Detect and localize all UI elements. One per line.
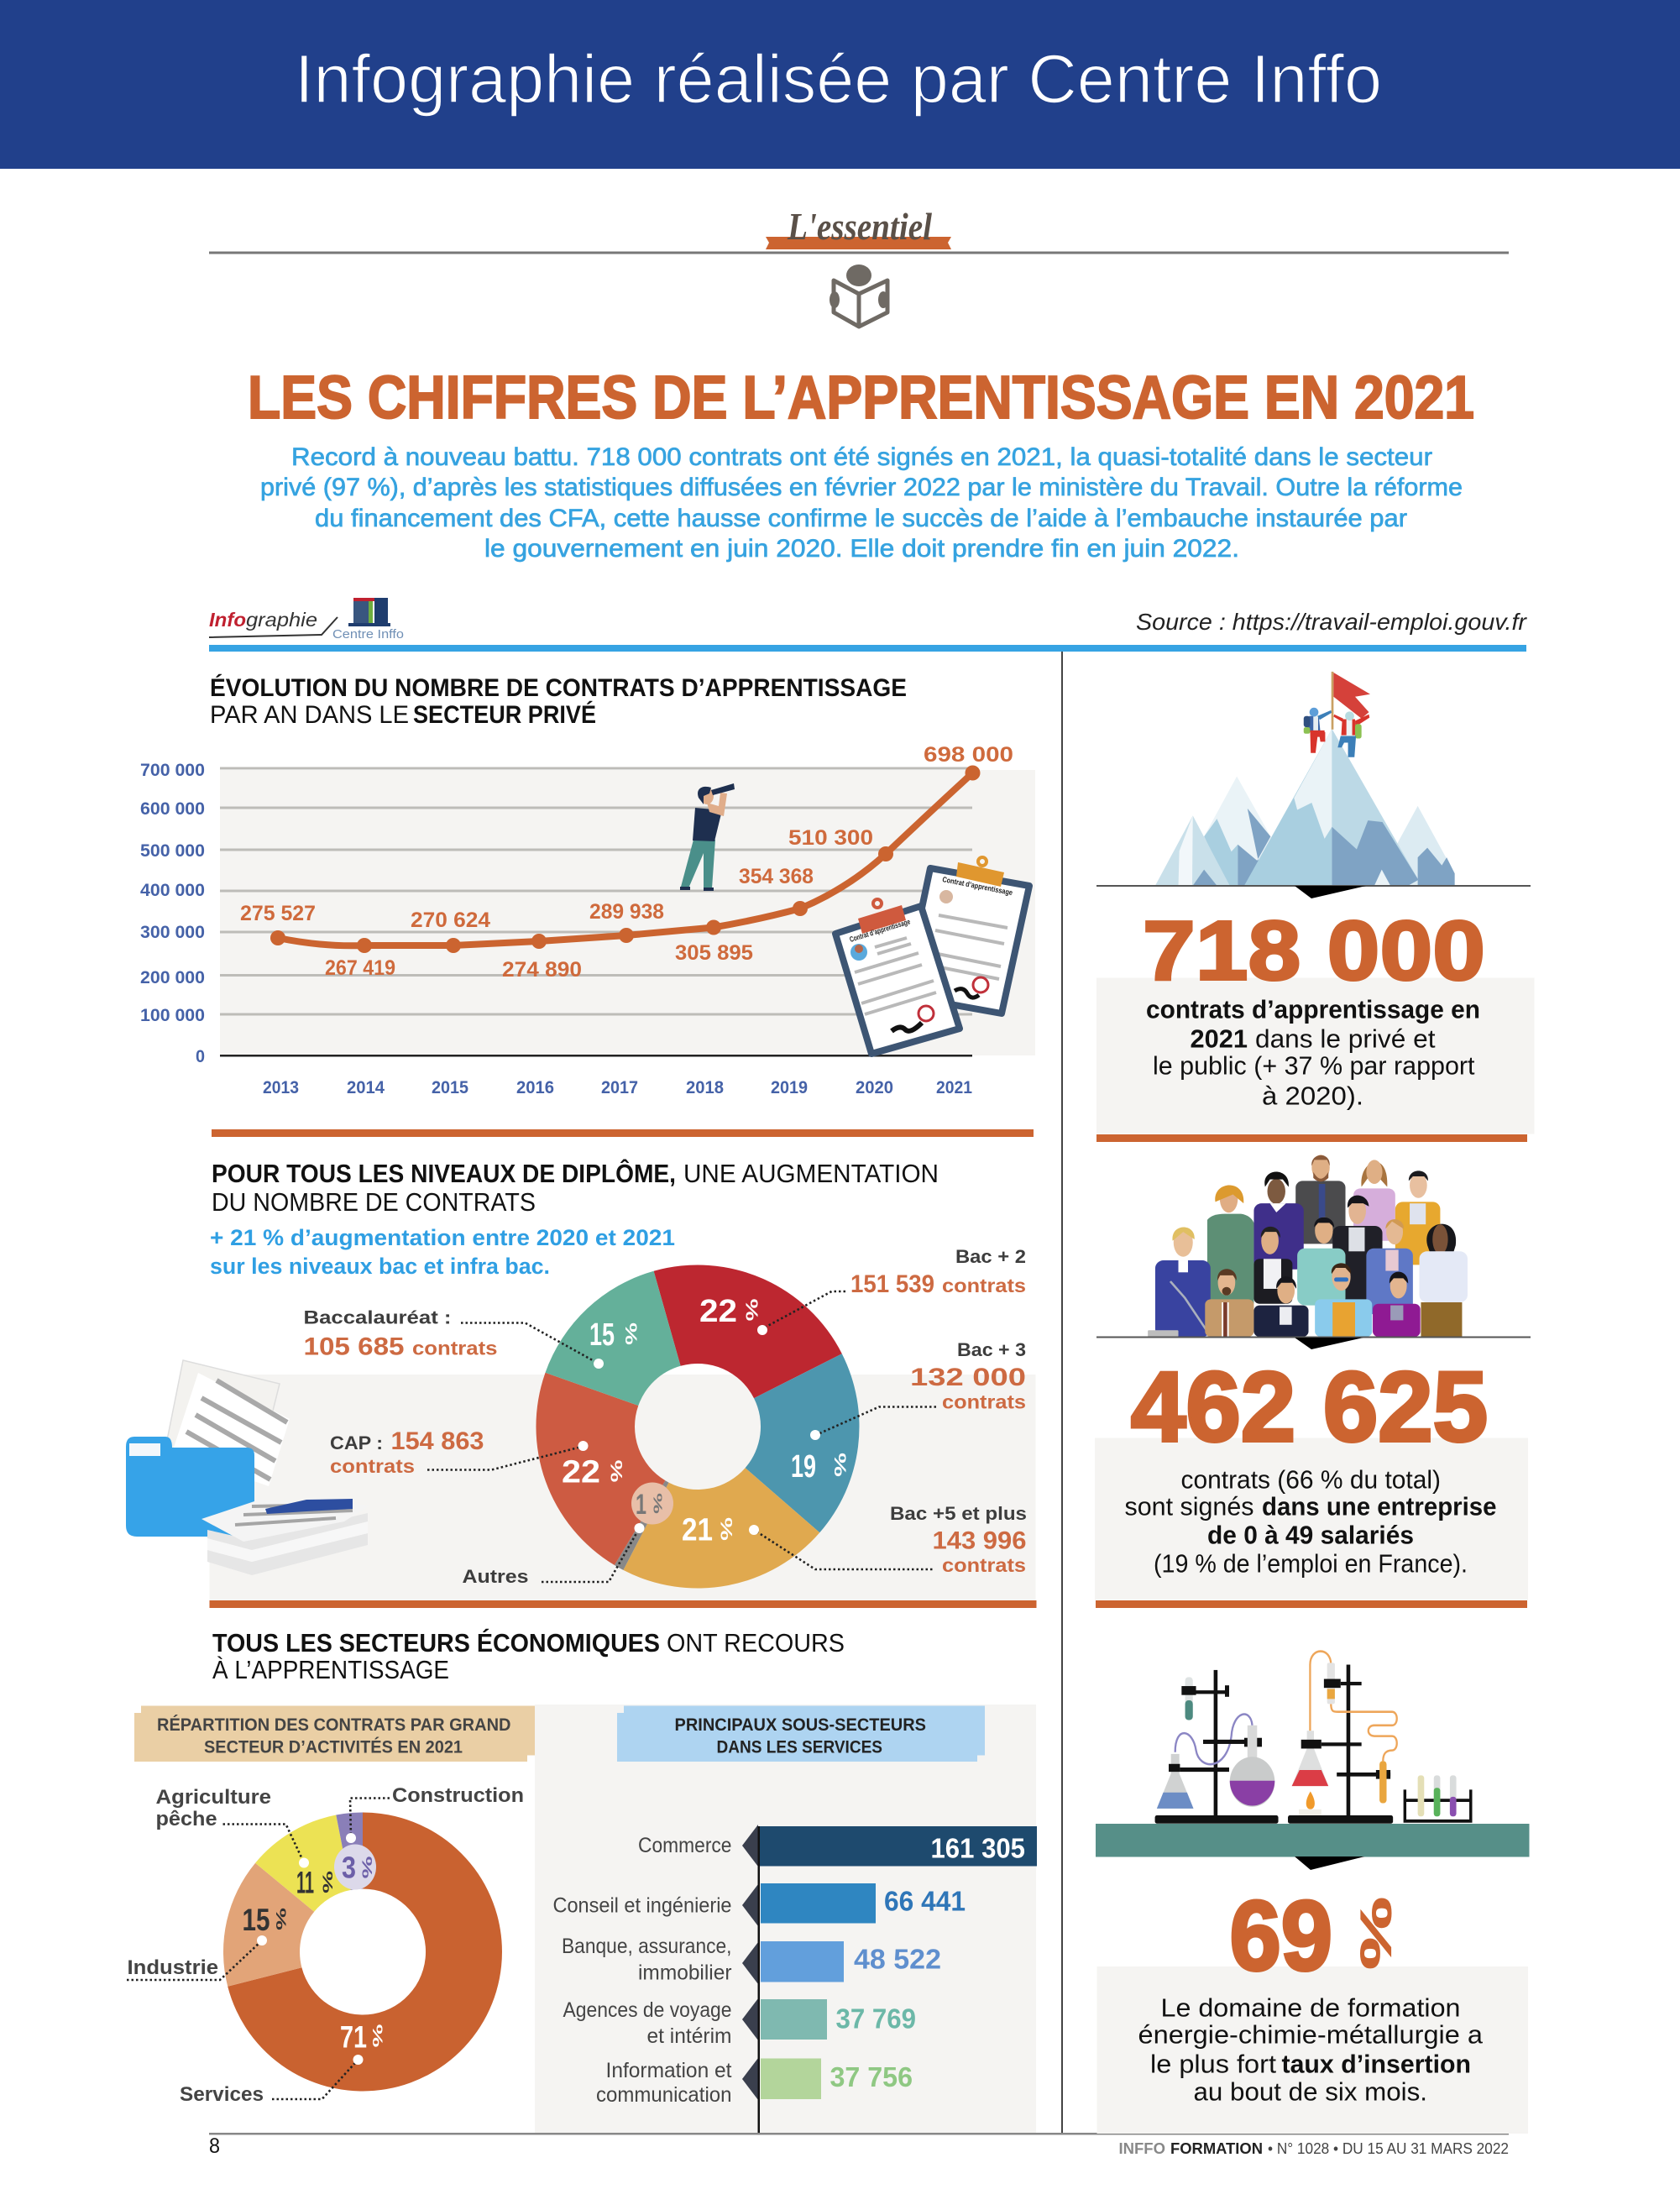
- heading: evolution: SECTEUR PRIVÉ: [413, 700, 596, 729]
- data labels: 274 890: [502, 958, 582, 982]
- footer credit: [1118, 2140, 1509, 2157]
- x axis labels: 2018: [686, 1078, 724, 1097]
- section rule: [212, 1129, 1034, 1137]
- leader lines: [427, 1291, 936, 1582]
- bar: agences: 37 769: [836, 2003, 916, 2034]
- x axis labels: 2021: [936, 1078, 972, 1097]
- heading: diploma: UNE AUGMENTATION: [683, 1159, 939, 1188]
- footer credit: INFFO: [1118, 2140, 1165, 2157]
- segment: Bac + 3: [746, 1354, 859, 1532]
- tag: repartition: SECTEUR D’ACTIVITÉS EN 2021: [204, 1738, 463, 1757]
- label: Baccalauréat: contrats: [412, 1337, 497, 1359]
- back clipboard: [903, 857, 1029, 1013]
- segment: agriculture: [255, 1815, 351, 1912]
- panel: evolution chart: [140, 673, 1035, 1137]
- description: sont signés: [1125, 1491, 1254, 1521]
- label: CAP: 154 863: [391, 1427, 484, 1455]
- data labels: 267 419: [325, 956, 395, 980]
- data labels: 275 527: [240, 902, 316, 925]
- icon: contract clipboards: [835, 857, 1029, 1054]
- donut chart: sectors: [223, 1812, 502, 2091]
- logo: Infographie Centre Inffo: graphie: [246, 609, 317, 631]
- logo: Infographie Centre Inffo: [209, 598, 404, 642]
- percent labels: [562, 1294, 848, 1548]
- label: Bac + 3: 132 000: [910, 1364, 1026, 1391]
- heading: diploma: DU NOMBRE DE CONTRATS: [212, 1187, 536, 1217]
- header banner: [0, 0, 1680, 169]
- data labels: 305 895: [675, 941, 753, 965]
- percent labels: 15: [242, 1903, 270, 1937]
- label: CAP: contrats: [330, 1455, 415, 1477]
- bar: information: communication: [596, 2083, 732, 2107]
- section tag: L'essentiel: L'essentiel: [787, 205, 932, 248]
- callout: 3 percent: [334, 1844, 376, 1889]
- intro paragraph: du financement des CFA, cette hausse confirme le succès de l’aide à l’embauche instaurée par: [315, 505, 1407, 532]
- line series with markers: [270, 766, 981, 953]
- leader lines: [127, 1799, 390, 2099]
- bar: banque: [562, 1935, 941, 1985]
- footer credit: • N° 1028 • DU 15 AU 31 MARS 2022: [1268, 2140, 1509, 2157]
- bar chart: sous-secteurs: [552, 1825, 1037, 2134]
- big number: 718 000: [1143, 903, 1485, 998]
- heading: evolution: [210, 673, 907, 729]
- donut chart: diploma levels: [536, 1265, 859, 1589]
- label: Bac + 2: [850, 1246, 1026, 1298]
- percent labels: %: [717, 1517, 734, 1541]
- section rule: [1096, 1600, 1527, 1608]
- header banner: Infographie réalisée par Centre Inffo: [295, 41, 1382, 118]
- label: CAP: [330, 1427, 484, 1477]
- percent labels: 21: [682, 1513, 713, 1548]
- panel background: [210, 1375, 1036, 1600]
- y axis labels: 700 000: [140, 761, 205, 780]
- label: Bac + 3: [910, 1339, 1026, 1412]
- label: Bac + 2: contrats: [942, 1275, 1026, 1296]
- icon: person with binoculars: [680, 783, 735, 891]
- label: Bac + 5 et plus: [890, 1503, 1027, 1576]
- label: Bac + 3: Bac + 3: [957, 1339, 1026, 1360]
- data labels: [240, 743, 1013, 982]
- x axis labels: 2013: [263, 1078, 299, 1097]
- label: Baccalauréat: [304, 1307, 497, 1360]
- bar: banque: 48 522: [854, 1943, 941, 1975]
- heading: sectors: ONT RECOURS: [667, 1628, 845, 1657]
- text panel: [1095, 1438, 1528, 1600]
- bar: information: 37 756: [830, 2061, 913, 2092]
- source note: Source : https://travail-emploi.gouv.fr: [1136, 609, 1528, 635]
- big number: [1229, 1881, 1400, 1992]
- section tag: L'essentiel: [209, 205, 1509, 254]
- heading: evolution: ÉVOLUTION DU NOMBRE DE CONTRATS D’APPRENTISSAGE: [210, 673, 907, 702]
- segment: construction: [336, 1812, 363, 1890]
- label: Bac + 2: Bac + 2: [955, 1246, 1026, 1267]
- segment: Baccalauréat: [546, 1271, 681, 1406]
- panel: economic sectors: [127, 1628, 1037, 2134]
- footer credit: FORMATION: [1170, 2140, 1263, 2157]
- panel: 69 %: [1096, 1652, 1530, 2134]
- description: contrats d’apprentissage en: [1146, 994, 1480, 1024]
- intro paragraph: le gouvernement en juin 2020. Elle doit prendre fin en juin 2022.: [484, 535, 1239, 563]
- y axis labels: 400 000: [140, 881, 205, 900]
- panel: 718 000: [1096, 672, 1535, 1142]
- divider line with notch: [1096, 1337, 1531, 1349]
- big number: 462 625: [1131, 1352, 1488, 1463]
- axis: [757, 1826, 760, 2134]
- section rule: [1096, 1134, 1527, 1142]
- description: [1146, 994, 1480, 1110]
- bar: conseil: Conseil et ingénierie: [552, 1894, 732, 1918]
- y axis labels: 500 000: [140, 841, 205, 861]
- description: dans une entreprise: [1262, 1491, 1496, 1521]
- description: de 0 à 49 salariés: [1207, 1520, 1414, 1550]
- label: Bac + 5 et plus: 143 996: [932, 1527, 1026, 1555]
- donut labels: pêche: [156, 1808, 217, 1830]
- icon: mountain with climbers: [1155, 672, 1455, 886]
- description: le public (+ 37 % par rapport: [1153, 1051, 1475, 1080]
- heading: evolution: PAR AN DANS LE: [210, 701, 409, 729]
- donut labels: Agriculture: [156, 1786, 271, 1809]
- segment: industrie: [223, 1863, 314, 1987]
- heading: sectors: TOUS LES SECTEURS ÉCONOMIQUES: [212, 1628, 660, 1657]
- y axis labels: 100 000: [140, 1006, 205, 1025]
- blue callout: sur les niveaux bac et infra bac.: [210, 1254, 550, 1279]
- illustration: chemistry lab: [1155, 1652, 1471, 1824]
- blue callout: [210, 1225, 675, 1279]
- icon: reader with open book: [830, 264, 888, 327]
- bar: banque: Banque, assurance,: [562, 1935, 732, 1958]
- x axis labels: 2019: [771, 1078, 808, 1097]
- y axis labels: 600 000: [140, 799, 205, 819]
- callout: 1 percent: 1: [636, 1489, 646, 1521]
- divider line with notch: [1096, 885, 1531, 898]
- bar: banque: immobilier: [638, 1961, 732, 1985]
- tag: sous-secteurs: [617, 1706, 985, 1762]
- bar: commerce: [638, 1825, 1037, 1867]
- percent labels: [242, 1866, 385, 2054]
- description: taux d’insertion: [1281, 2049, 1471, 2079]
- percent labels: %: [742, 1298, 761, 1322]
- description: dans le privé et: [1255, 1024, 1436, 1053]
- y axis labels: 300 000: [140, 923, 205, 942]
- callout: 3 percent: 3: [342, 1851, 356, 1884]
- bar: commerce: 161 305: [930, 1832, 1025, 1864]
- panel: diploma levels: [126, 1158, 1036, 1608]
- section rule: [210, 1600, 1036, 1608]
- tag: repartition: [134, 1706, 535, 1762]
- intro paragraph: privé (97 %), d’après les statistiques diffusées en février 2022 par le ministère du Travail. Outre la réforme: [260, 474, 1463, 501]
- donut labels: [128, 1784, 524, 2106]
- description: énergie-chimie-métallurgie a: [1138, 2020, 1484, 2049]
- bar: information: Information et: [606, 2059, 732, 2082]
- logo: Infographie Centre Inffo: Info: [209, 609, 246, 631]
- front clipboard: Contrat d’apprentissage: [849, 917, 911, 944]
- description: à 2020).: [1262, 1081, 1363, 1110]
- tag: sous-secteurs: PRINCIPAUX SOUS-SECTEURS: [675, 1715, 926, 1735]
- logo: Infographie Centre Inffo: Centre Inffo: [332, 627, 404, 642]
- segment: CAP: [536, 1373, 665, 1565]
- description: (19 % de l’emploi en France).: [1154, 1548, 1468, 1579]
- label: Autres: Autres: [462, 1566, 529, 1587]
- x axis labels: 2014: [347, 1078, 385, 1097]
- bar: conseil: [552, 1883, 966, 1926]
- data labels: 354 368: [739, 865, 814, 888]
- x axis labels: [263, 1078, 972, 1097]
- x axis labels: 2017: [601, 1078, 638, 1097]
- donut labels: [304, 1246, 1027, 1587]
- percent labels: 22: [562, 1454, 600, 1490]
- x axis labels: 2020: [856, 1078, 893, 1097]
- data labels: 289 938: [589, 900, 664, 924]
- panel: 462 625: [1095, 1155, 1531, 1608]
- segment: services: [228, 1812, 502, 2091]
- percent labels: 11: [296, 1866, 314, 1899]
- description: contrats (66 % du total): [1180, 1464, 1441, 1495]
- tag: repartition: RÉPARTITION DES CONTRATS PAR GRAND: [157, 1715, 510, 1735]
- description: 2021: [1191, 1024, 1248, 1053]
- y axis labels: [140, 761, 205, 1066]
- percent labels: %: [830, 1453, 848, 1477]
- description: [1138, 1993, 1484, 2106]
- tag: sous-secteurs: DANS LES SERVICES: [717, 1738, 882, 1757]
- y axis labels: 200 000: [140, 968, 205, 987]
- icon: blue folder with papers and pen: [126, 1360, 369, 1575]
- data labels: 510 300: [788, 826, 873, 850]
- label: Baccalauréat: 105 685: [304, 1333, 405, 1360]
- bar: agences: [563, 1998, 916, 2048]
- segment: Bac + 5 et plus: [623, 1468, 819, 1589]
- callout: 3 percent: %: [359, 1856, 374, 1879]
- services panel background: [535, 1705, 1036, 2134]
- data labels: 270 624: [411, 909, 490, 932]
- x axis labels: 2015: [432, 1078, 468, 1097]
- callout: 1 percent: %: [650, 1493, 665, 1514]
- percent labels: %: [273, 1908, 289, 1930]
- label: Bac + 5 et plus: contrats: [942, 1554, 1026, 1576]
- label: Bac + 5 et plus: Bac +5 et plus: [890, 1503, 1027, 1524]
- description: [1125, 1464, 1496, 1579]
- blue callout: + 21 % d’augmentation entre 2020 et 2021: [210, 1225, 675, 1250]
- donut labels: Services: [180, 2083, 264, 2106]
- intro paragraph: Record à nouveau battu. 718 000 contrats ont été signés en 2021, la quasi-totalité dans le secteur: [291, 443, 1432, 471]
- label: Bac + 3: contrats: [942, 1390, 1026, 1412]
- heading: diploma: POUR TOUS LES NIVEAUX DE DIPLÔME,: [212, 1158, 676, 1188]
- description: Le domaine de formation: [1160, 1993, 1461, 2022]
- intro paragraph: [260, 443, 1463, 563]
- heading: diploma: [212, 1158, 939, 1217]
- illustration: group of people: [1148, 1155, 1468, 1337]
- chart background and gridlines: [220, 768, 1035, 1056]
- bar: information: [596, 2058, 913, 2107]
- x axis labels: 2016: [516, 1078, 554, 1097]
- front clipboard: [835, 899, 960, 1054]
- percent labels: %: [621, 1322, 639, 1345]
- lab table with notch: [1096, 1824, 1530, 1870]
- percent labels: 19: [791, 1449, 816, 1485]
- y axis labels: 0: [196, 1047, 205, 1066]
- bar: conseil: 66 441: [884, 1886, 966, 1916]
- title: LES CHIFFRES DE L’APPRENTISSAGE EN 2021: [248, 364, 1474, 432]
- percent labels: 22: [699, 1294, 737, 1329]
- bar: agences: Agences de voyage: [563, 1998, 732, 2022]
- label: CAP: CAP :: [330, 1432, 383, 1453]
- donut labels: Industrie: [128, 1956, 218, 1979]
- callout: 1 percent: [631, 1483, 673, 1525]
- back clipboard: Contrat d’apprentissage: [942, 875, 1013, 897]
- page number: 8: [209, 2134, 220, 2158]
- description: au bout de six mois.: [1194, 2077, 1427, 2106]
- percent labels: 15: [589, 1317, 615, 1353]
- heading: sectors: À L’APPRENTISSAGE: [212, 1655, 449, 1684]
- text panel: [1096, 1966, 1528, 2134]
- footer rule: [209, 2133, 1509, 2134]
- blue divider and column rule: [209, 645, 1526, 2134]
- percent labels: %: [606, 1459, 625, 1483]
- segment: Bac + 2: [654, 1265, 842, 1398]
- big number: 69: [1229, 1881, 1332, 1992]
- label: Baccalauréat: Baccalauréat :: [304, 1307, 452, 1328]
- label: Bac + 2: 151 539: [850, 1270, 934, 1298]
- heading: sectors: [212, 1628, 845, 1684]
- data labels: 698 000: [924, 743, 1013, 767]
- segment: autres: [615, 1480, 668, 1570]
- description: le plus fort: [1150, 2049, 1276, 2079]
- donut labels: Construction: [392, 1784, 524, 1807]
- percent labels: %: [319, 1871, 336, 1893]
- bar: commerce: Commerce: [638, 1834, 732, 1857]
- percent labels: 71: [340, 2020, 367, 2054]
- bar: agences: et intérim: [646, 2024, 732, 2048]
- text panel: [1096, 977, 1535, 1134]
- big number: %: [1351, 1897, 1400, 1970]
- percent labels: %: [369, 2024, 385, 2047]
